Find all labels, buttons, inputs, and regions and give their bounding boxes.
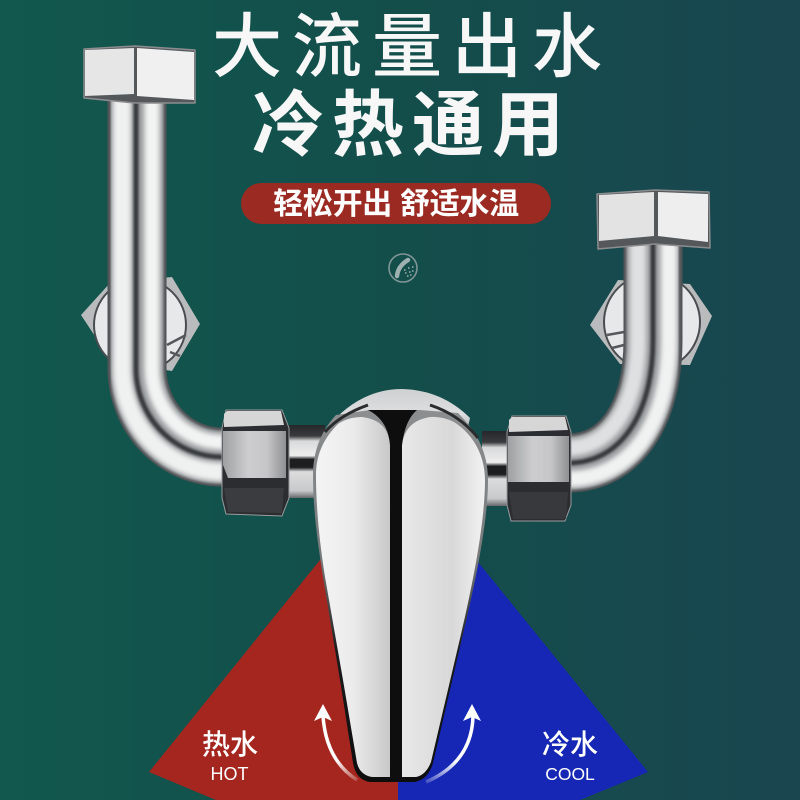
subtitle pill: 轻松开出 舒适水温 (273, 188, 519, 221)
arrow: hot (314, 704, 357, 780)
icon: shower head (389, 254, 417, 282)
hot water sector (149, 490, 398, 800)
right pipe (568, 240, 669, 479)
top right nut (597, 190, 710, 249)
left compression nut (222, 410, 289, 516)
hot label: 热水 (202, 729, 258, 760)
arrow: cold (426, 704, 481, 782)
subtitle pill (241, 183, 551, 224)
black centre spine (368, 410, 417, 780)
right lobe (402, 417, 485, 777)
handle (313, 389, 488, 782)
left pipe (122, 96, 224, 472)
cold label (542, 729, 598, 784)
right hex nut behind pipe (590, 274, 712, 370)
right compression nut (507, 416, 571, 521)
right connector (482, 431, 512, 506)
left hex nut behind pipe (81, 277, 200, 371)
title line 2: 冷热通用 (252, 86, 572, 166)
handle dome (336, 389, 470, 440)
left connector (285, 425, 325, 498)
cold label: 冷水 (542, 729, 598, 760)
title line 1: 大流量出水 (212, 8, 612, 86)
handle body (313, 410, 488, 782)
dome reflections (325, 405, 478, 438)
cold water sector (398, 490, 648, 800)
left lobe (316, 417, 390, 777)
hot label: HOT (210, 764, 248, 784)
cold label: COOL (545, 764, 595, 784)
hot label (202, 729, 258, 784)
top left nut (84, 46, 195, 103)
